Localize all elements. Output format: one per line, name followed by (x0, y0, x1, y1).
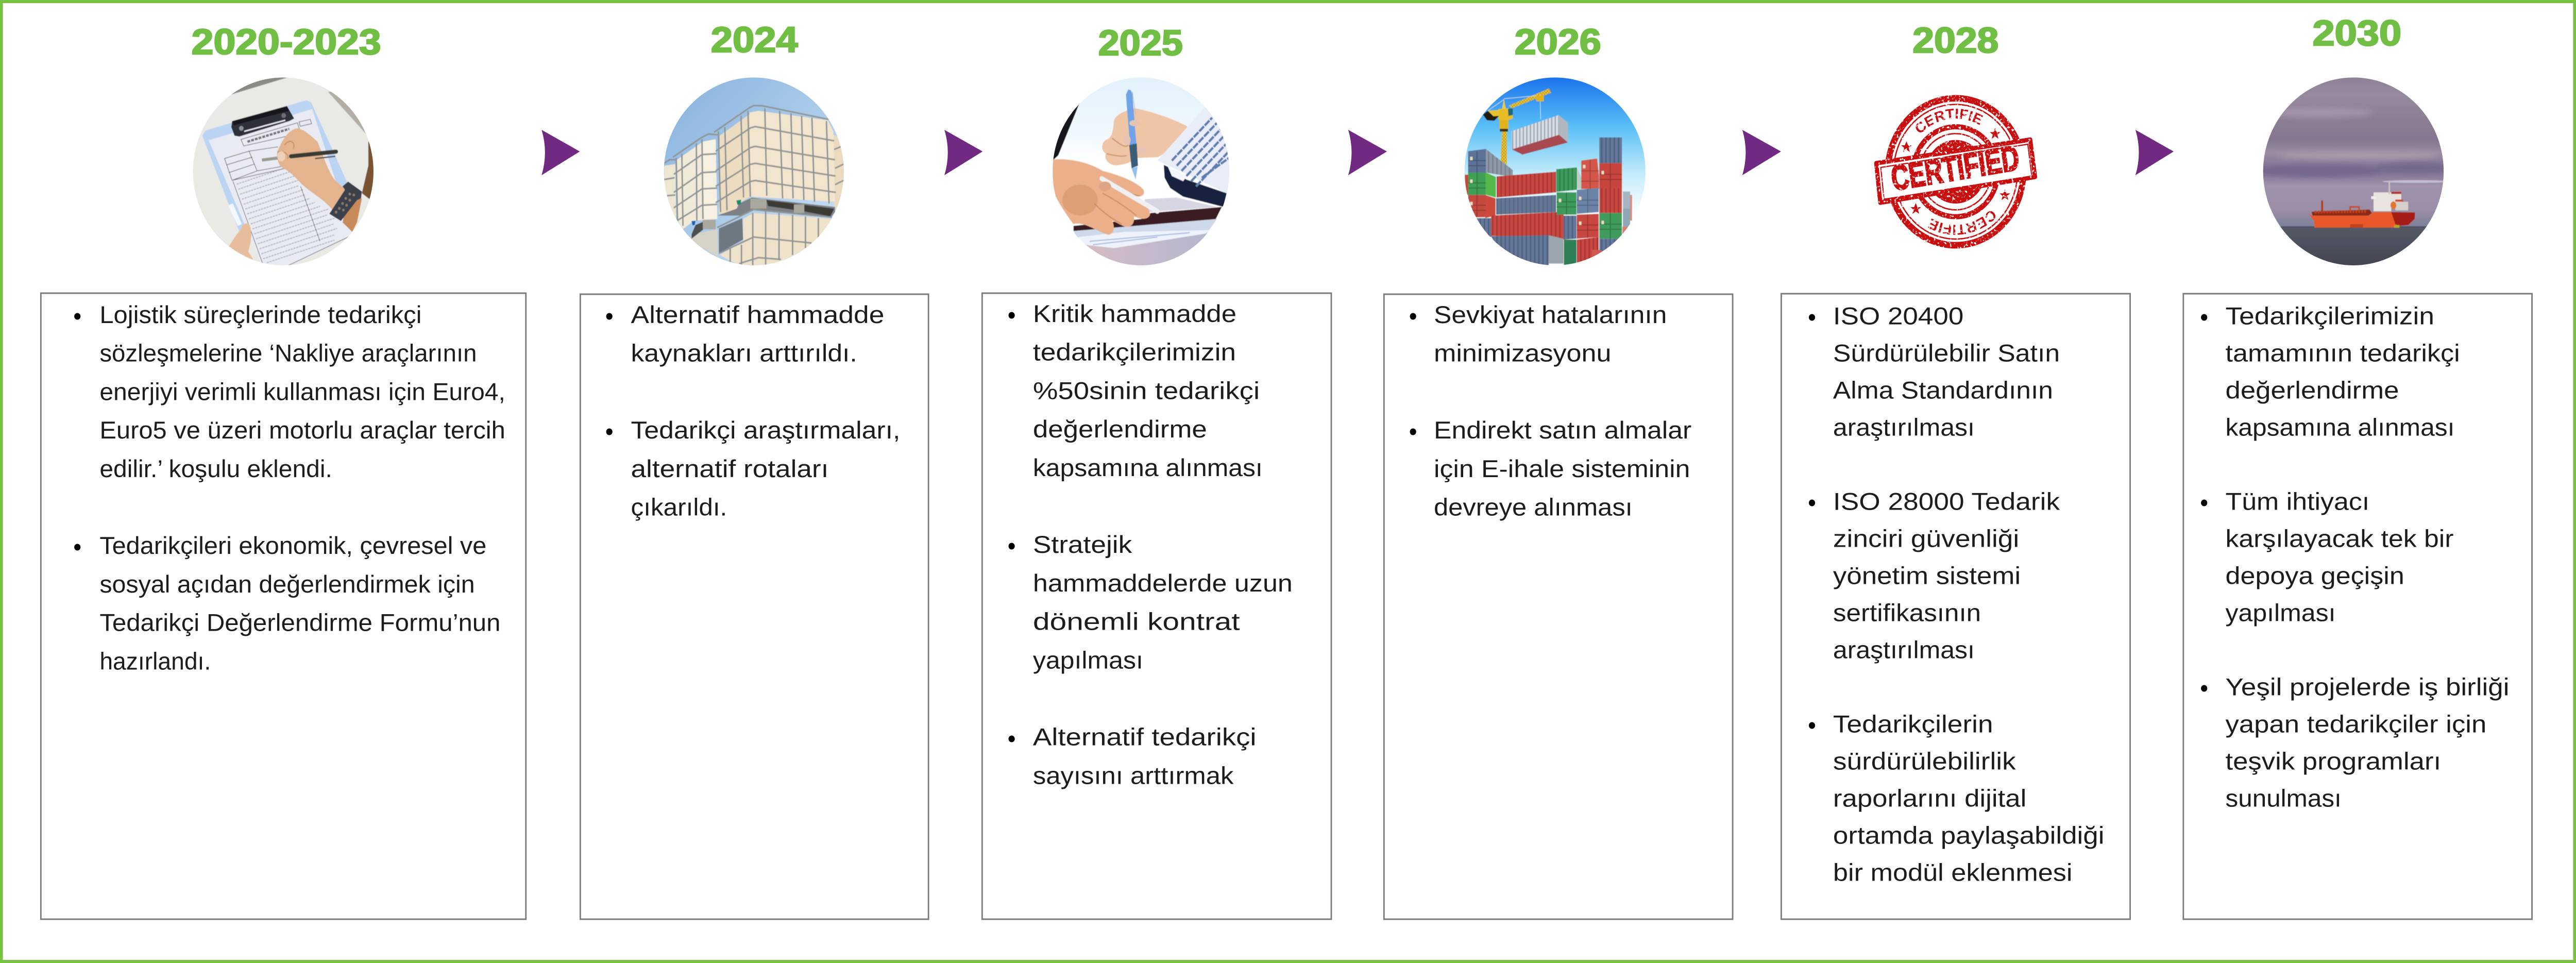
panel frame (2183, 294, 2532, 919)
bullet text (1809, 302, 2104, 886)
panel: 2025 (982, 293, 1331, 919)
bullet text: Sevkiyat hatalarının (1434, 301, 1667, 328)
bullet text: Stratejik (1033, 531, 1132, 559)
bullet text: Alternatif tedarikçi (1033, 723, 1257, 751)
year heading: 2020-2023: 2020-2023 (192, 22, 381, 62)
year heading: 2030: 2030 (2312, 13, 2401, 53)
bullet text: alternatif rotaları (631, 455, 828, 482)
stamp: CERTIFIED seal: CERTIFIED (1928, 211, 1996, 235)
bullet text: Alma Standardının (1833, 377, 2053, 404)
bullet text: teşvik programları (2226, 748, 2441, 775)
bullet text: karşılayacak tek bir (2226, 525, 2454, 552)
bullet text: Tedarikçilerimizin (2226, 302, 2434, 330)
bullet text: yönetim sistemi (1833, 562, 2021, 589)
stamp: CERTIFIED seal: CERTIFIED (1916, 108, 1984, 132)
bullet text: değerlendirme (2226, 377, 2399, 404)
bullet text: enerjiyi verimli kullanması için Euro4, (99, 378, 505, 406)
panel: 2028 (1781, 294, 2130, 919)
panel: 2020-2023 (41, 293, 526, 919)
bullet text: değerlendirme (1033, 416, 1207, 443)
bullet text (1410, 301, 1691, 521)
bullet text (606, 301, 900, 521)
bullet text: tedarikçilerimizin (1033, 339, 1236, 366)
photo: two hands with pens exchanging a document (1053, 77, 1229, 265)
bullet text: kapsamına alınması (1033, 454, 1263, 481)
photo: hand filling a form on a clipboard (193, 77, 374, 265)
bullet text: için E-ihale sisteminin (1434, 455, 1690, 482)
bullet text: kaynakları arttırıldı. (631, 340, 857, 367)
bullet text: yapılması (2226, 599, 2336, 627)
panel: 2030 (2183, 294, 2532, 919)
year heading: 2025: 2025 (1098, 23, 1183, 63)
bullet text: %50sinin tedarikçi (1033, 377, 1260, 404)
photo: orange tanker at sea (2263, 77, 2444, 265)
bullet text: Endirekt satın almalar (1434, 417, 1691, 444)
bullet text: ISO 28000 Tedarik (1833, 488, 2060, 515)
bullet text: Tedarikçileri ekonomik, çevresel ve (99, 532, 486, 560)
bullet text: Lojistik süreçlerinde tedarikçi (99, 301, 421, 328)
panel: 2024 (580, 294, 928, 919)
arrow 1 (541, 130, 580, 175)
bullet text: edilir.’ koşulu eklendi. (99, 455, 332, 482)
bullet text: Kritik hammadde (1033, 300, 1236, 327)
arrow 3 (1348, 130, 1387, 175)
bullet text: sürdürülebilirlik (1833, 748, 2016, 775)
bullet text: Yeşil projelerde iş birliği (2226, 673, 2509, 701)
bullet text: ISO 20400 (1833, 302, 1963, 330)
bullet text: Tüm ihtiyacı (2226, 488, 2369, 515)
stamp: CERTIFIED seal (1874, 95, 2037, 248)
bullet text (74, 301, 505, 675)
bullet text: Euro5 ve üzeri motorlu araçlar tercih (99, 417, 505, 444)
bullet text: sözleşmelerine ‘Nakliye araçlarının (99, 340, 477, 367)
bullet text: sunulması (2226, 785, 2342, 812)
bullet text: yapılması (1033, 647, 1143, 674)
photo: stacked IBC tanks against the sky (664, 77, 844, 265)
panel frame (41, 293, 526, 919)
bullet text: Alternatif hammadde (631, 301, 884, 328)
bullet text: hammaddelerde uzun (1033, 570, 1293, 597)
panel: 2026 (1384, 294, 1733, 919)
bullet text: kapsamına alınması (2226, 414, 2454, 441)
bullet text: raporlarını dijital (1833, 785, 2026, 812)
bullet text: araştırılması (1833, 636, 1975, 664)
bullet text: ortamda paylaşabildiği (1833, 822, 2104, 849)
panel frame (580, 294, 928, 919)
bullet text: minimizasyonu (1434, 340, 1611, 367)
bullet text: zinciri güvenliği (1833, 525, 2019, 552)
bullet text: sosyal açıdan değerlendirmek için (99, 571, 475, 598)
year heading: 2028: 2028 (1912, 21, 1998, 60)
bullet text: Tedarikçi araştırmaları, (631, 417, 900, 444)
arrow 2 (944, 130, 982, 175)
panel frame (982, 293, 1331, 919)
stamp: CERTIFIED seal: CERTIFIED (1889, 138, 2022, 198)
bullet text: sertifikasının (1833, 599, 1981, 627)
bullet text: hazırlandı. (99, 648, 211, 675)
bullet text: devreye alınması (1434, 494, 1633, 521)
bullet text: sayısını arttırmak (1033, 762, 1234, 789)
bullet text: çıkarıldı. (631, 494, 727, 521)
panel frame (1781, 294, 2130, 919)
bullet text: depoya geçişin (2226, 562, 2404, 589)
arrow 4 (1742, 130, 1781, 175)
bullet text: bir modül eklenmesi (1833, 859, 2073, 886)
bullet text (1008, 300, 1293, 789)
bullet text: Tedarikçilerin (1833, 711, 1993, 738)
bullet text: dönemli kontrat (1033, 608, 1240, 635)
photo: container yard with crane (1464, 77, 1646, 265)
bullet text: Tedarikçi Değerlendirme Formu’nun (99, 609, 500, 636)
bullet text: tamamının tedarikçi (2226, 340, 2460, 367)
bullet text (2201, 302, 2509, 812)
year heading: 2024: 2024 (711, 20, 798, 60)
year heading: 2026: 2026 (1515, 22, 1601, 62)
bullet text: Sürdürülebilir Satın (1833, 340, 2060, 367)
bullet text: araştırılması (1833, 414, 1975, 441)
bullet text: yapan tedarikçiler için (2226, 711, 2486, 738)
arrow 5 (2136, 130, 2174, 175)
panel frame (1384, 294, 1733, 919)
